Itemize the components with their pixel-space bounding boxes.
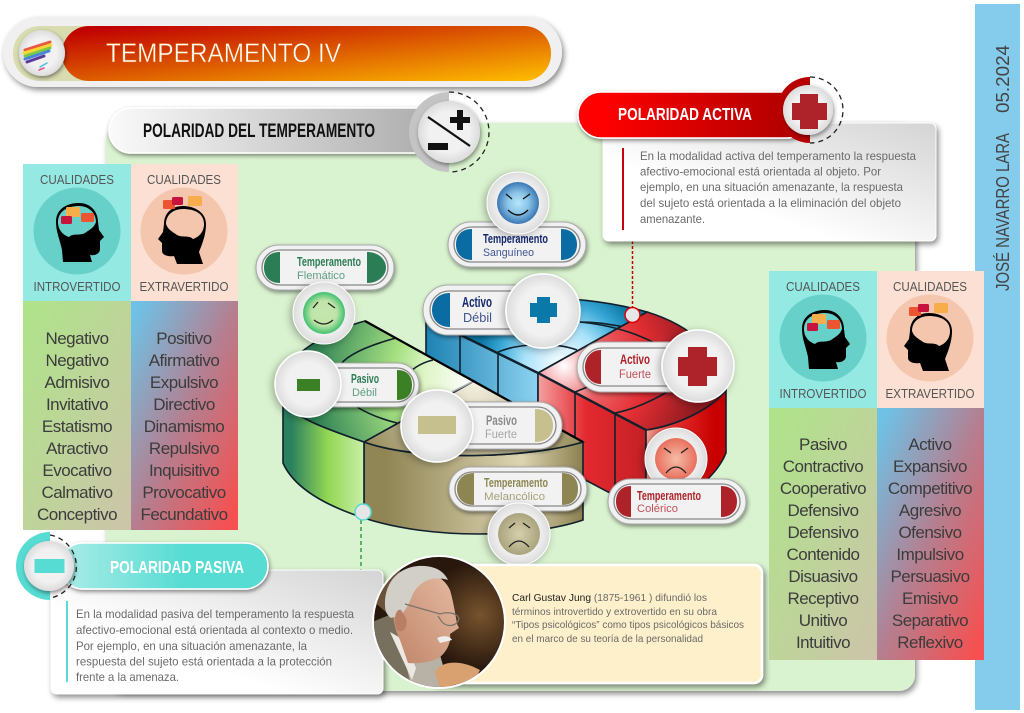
button: Pasivo Débil	[300, 363, 419, 407]
icon: angry red face	[645, 428, 707, 490]
list: left introvert qualities: Estatismo	[42, 417, 112, 436]
list: right extravert qualities: Persuasivo	[890, 567, 970, 586]
side strip: author and date: JOSÉ NAVARRO LARA	[993, 133, 1013, 291]
button: Temperamento Flemático: Flemático	[297, 270, 345, 282]
panel: active polarity text card: del sujeto está orientada a la eliminación del objeto	[640, 196, 901, 210]
table: left qualities header	[23, 164, 238, 301]
list: left extravert qualities: Expulsivo	[150, 373, 218, 392]
panel: green background	[106, 123, 915, 691]
table: right qualities header: CUALIDADES	[786, 279, 860, 294]
button: Temperamento Flemático: Temperamento	[297, 254, 361, 269]
panel: Carl Jung note	[430, 565, 762, 683]
table: right qualities header: INTROVERTIDO	[780, 386, 866, 401]
button: Temperamento Sanguíneo: Temperamento	[483, 231, 548, 246]
heading: polaridad pasiva	[16, 532, 268, 600]
button: Activo Fuerte	[577, 342, 697, 392]
button: Pasivo Fuerte: Pasivo	[486, 412, 517, 428]
list: right extravert qualities: Competitivo	[888, 479, 972, 498]
button: Temperamento Colérico: Colérico	[637, 503, 678, 515]
button: Temperamento Sanguíneo: Sanguíneo	[483, 247, 534, 259]
button: Temperamento Colérico	[608, 479, 746, 524]
icon: introvert head	[780, 294, 866, 382]
list: left introvert qualities: Conceptivo	[37, 505, 117, 524]
panel: active polarity text card: amenazante.	[640, 212, 705, 226]
button: Activo Fuerte: Fuerte	[619, 367, 651, 381]
panel: passive polarity text card	[51, 570, 383, 694]
portrait: Carl Jung	[370, 555, 510, 690]
button: Temperamento Melancólico: Temperamento	[484, 475, 548, 490]
icon: introvert head	[34, 188, 120, 274]
icon: smiling green face	[293, 282, 355, 344]
button: Temperamento Flemático	[256, 245, 394, 290]
panel: passive polarity text card: Por ejemplo, en una situación amenazante, la	[76, 639, 307, 653]
list: right extravert qualities: Reflexivo	[897, 633, 963, 652]
heading: polaridad del temperamento: POLARIDAD DEL TEMPERAMENTO	[143, 121, 375, 142]
list: right extravert qualities: Ofensivo	[898, 523, 962, 542]
button: Temperamento Sanguíneo	[448, 222, 586, 267]
heading: polaridad activa	[578, 77, 843, 143]
table: right qualities header: EXTRAVERTIDO	[886, 386, 974, 401]
connector: active pole	[632, 241, 634, 308]
sector: active strong (red)	[426, 312, 726, 512]
list: left extravert qualities: Repulsivo	[149, 439, 219, 458]
heading: polaridad activa: POLARIDAD ACTIVA	[618, 104, 752, 124]
list: left extravert qualities: Directivo	[153, 395, 215, 414]
button: Pasivo Débil: Pasivo	[351, 372, 379, 386]
table: left qualities header: CUALIDADES	[40, 172, 114, 187]
button: Temperamento Melancólico	[449, 467, 587, 511]
button: Temperamento Melancólico: Melancólico	[484, 491, 545, 503]
list: right introvert qualities: Cooperativo	[780, 479, 866, 498]
panel: active polarity text card: ejemplo, en una situación amenazante, la respuesta	[640, 180, 903, 194]
table: left qualities header: EXTRAVERTIDO	[140, 279, 228, 294]
heading: main title: TEMPERAMENTO IV	[106, 38, 341, 68]
list: right extravert qualities: Activo	[908, 435, 952, 454]
list: left introvert qualities: Negativo	[45, 329, 109, 348]
panel: Carl Jung note: términos introvertido y extrovertido en su obra	[512, 606, 717, 618]
panel: active polarity text card	[603, 123, 936, 241]
icon: extravert head	[140, 188, 228, 274]
button: Pasivo Fuerte	[440, 402, 562, 449]
sector: active weak (blue)	[426, 298, 647, 470]
list: right extravert qualities	[877, 408, 984, 660]
list: left introvert qualities	[23, 301, 131, 530]
list: left introvert qualities: Calmativo	[41, 483, 113, 502]
connector: passive pole	[360, 520, 362, 572]
list: left introvert qualities: Invitativo	[46, 395, 108, 414]
list: right introvert qualities: Receptivo	[787, 589, 859, 608]
side strip: author and date: 05.2024	[993, 45, 1013, 113]
list: right introvert qualities: Contenido	[786, 545, 860, 564]
list: left extravert qualities: Dinamismo	[144, 417, 224, 436]
sector: passive weak (green)	[283, 321, 583, 518]
list: right extravert qualities: Agresivo	[899, 501, 961, 520]
title banner	[3, 17, 562, 87]
list: left extravert qualities	[131, 301, 238, 530]
sector: passive strong (tan)	[364, 381, 583, 534]
list: right introvert qualities	[769, 408, 877, 660]
button: Pasivo Fuerte: Fuerte	[485, 429, 517, 441]
list: right extravert qualities: Separativo	[892, 611, 968, 630]
list: left introvert qualities: Atractivo	[46, 439, 108, 458]
node: passive marker	[355, 504, 371, 520]
table: right qualities header	[769, 271, 984, 408]
list: right introvert qualities: Defensivo	[787, 523, 859, 542]
button: Activo Débil	[423, 285, 548, 335]
panel: Carl Jung note: Carl Gustav Jung (1875-1961 ) difundió los	[512, 592, 707, 604]
icon: red plus	[662, 330, 734, 402]
list: right extravert qualities: Emisivo	[902, 589, 958, 608]
table: left qualities header: INTROVERTIDO	[34, 279, 120, 294]
panel: Carl Jung note: “Tipos psicológicos” como tipos psicológicos básicos	[512, 619, 744, 631]
list: left introvert qualities: Evocativo	[42, 461, 112, 480]
list: left introvert qualities: Admisivo	[45, 373, 110, 392]
list: right introvert qualities: Pasivo	[799, 435, 847, 454]
panel: active polarity text card: En la modalidad activa del temperamento la respuesta	[640, 149, 916, 163]
panel: passive polarity text card: frente a la amenaza.	[76, 670, 179, 684]
panel: active polarity text card: afectivo-emocional está orientada al objeto. Por	[640, 164, 881, 178]
button: Activo Fuerte: Activo	[620, 351, 650, 367]
button: Pasivo Débil: Débil	[352, 387, 377, 399]
button: Activo Débil: Débil	[463, 311, 492, 325]
side strip: author and date	[975, 4, 1020, 710]
list: left introvert qualities: Negativo	[45, 351, 109, 370]
heading: polaridad pasiva: POLARIDAD PASIVA	[110, 557, 244, 577]
node: active marker	[625, 308, 640, 322]
list: left extravert qualities: Afirmativo	[149, 351, 219, 370]
panel: Carl Jung note: en el marco de su teoría de la personalidad	[512, 633, 703, 645]
icon: happy blue face	[487, 172, 549, 234]
list: right introvert qualities: Defensivo	[787, 501, 859, 520]
heading: polaridad del temperamento	[109, 92, 489, 172]
chart: 3D temperament pie	[283, 298, 726, 534]
icon: blue plus	[506, 274, 580, 348]
icon: sad tan face	[488, 503, 550, 565]
icon: green minus	[275, 351, 341, 417]
list: left extravert qualities: Inquisitivo	[149, 461, 219, 480]
panel: passive polarity text card: afectivo-emocional está orientada al contexto o medio.	[76, 623, 353, 637]
panel: passive polarity text card: respuesta del sujeto está orientada a la protección	[76, 654, 332, 668]
list: right extravert qualities: Expansivo	[893, 457, 967, 476]
icon: rainbow brush circle	[19, 30, 65, 76]
list: left extravert qualities: Fecundativo	[140, 505, 228, 524]
table: right qualities header: CUALIDADES	[893, 279, 967, 294]
list: right introvert qualities: Contractivo	[783, 457, 863, 476]
button: Temperamento Colérico: Temperamento	[637, 488, 701, 503]
icon: extravert head	[886, 294, 974, 382]
panel: passive polarity text card: En la modalidad pasiva del temperamento la respuesta	[76, 607, 354, 621]
button: Activo Débil: Activo	[462, 295, 492, 311]
list: right introvert qualities: Intuitivo	[796, 633, 850, 652]
list: right introvert qualities: Unitivo	[799, 611, 847, 630]
list: left extravert qualities: Provocativo	[142, 483, 226, 502]
icon: tan minus	[401, 390, 473, 462]
table: left qualities header: CUALIDADES	[147, 172, 221, 187]
list: left extravert qualities: Positivo	[156, 329, 212, 348]
list: right introvert qualities: Disuasivo	[788, 567, 858, 586]
list: right extravert qualities: Impulsivo	[896, 545, 964, 564]
